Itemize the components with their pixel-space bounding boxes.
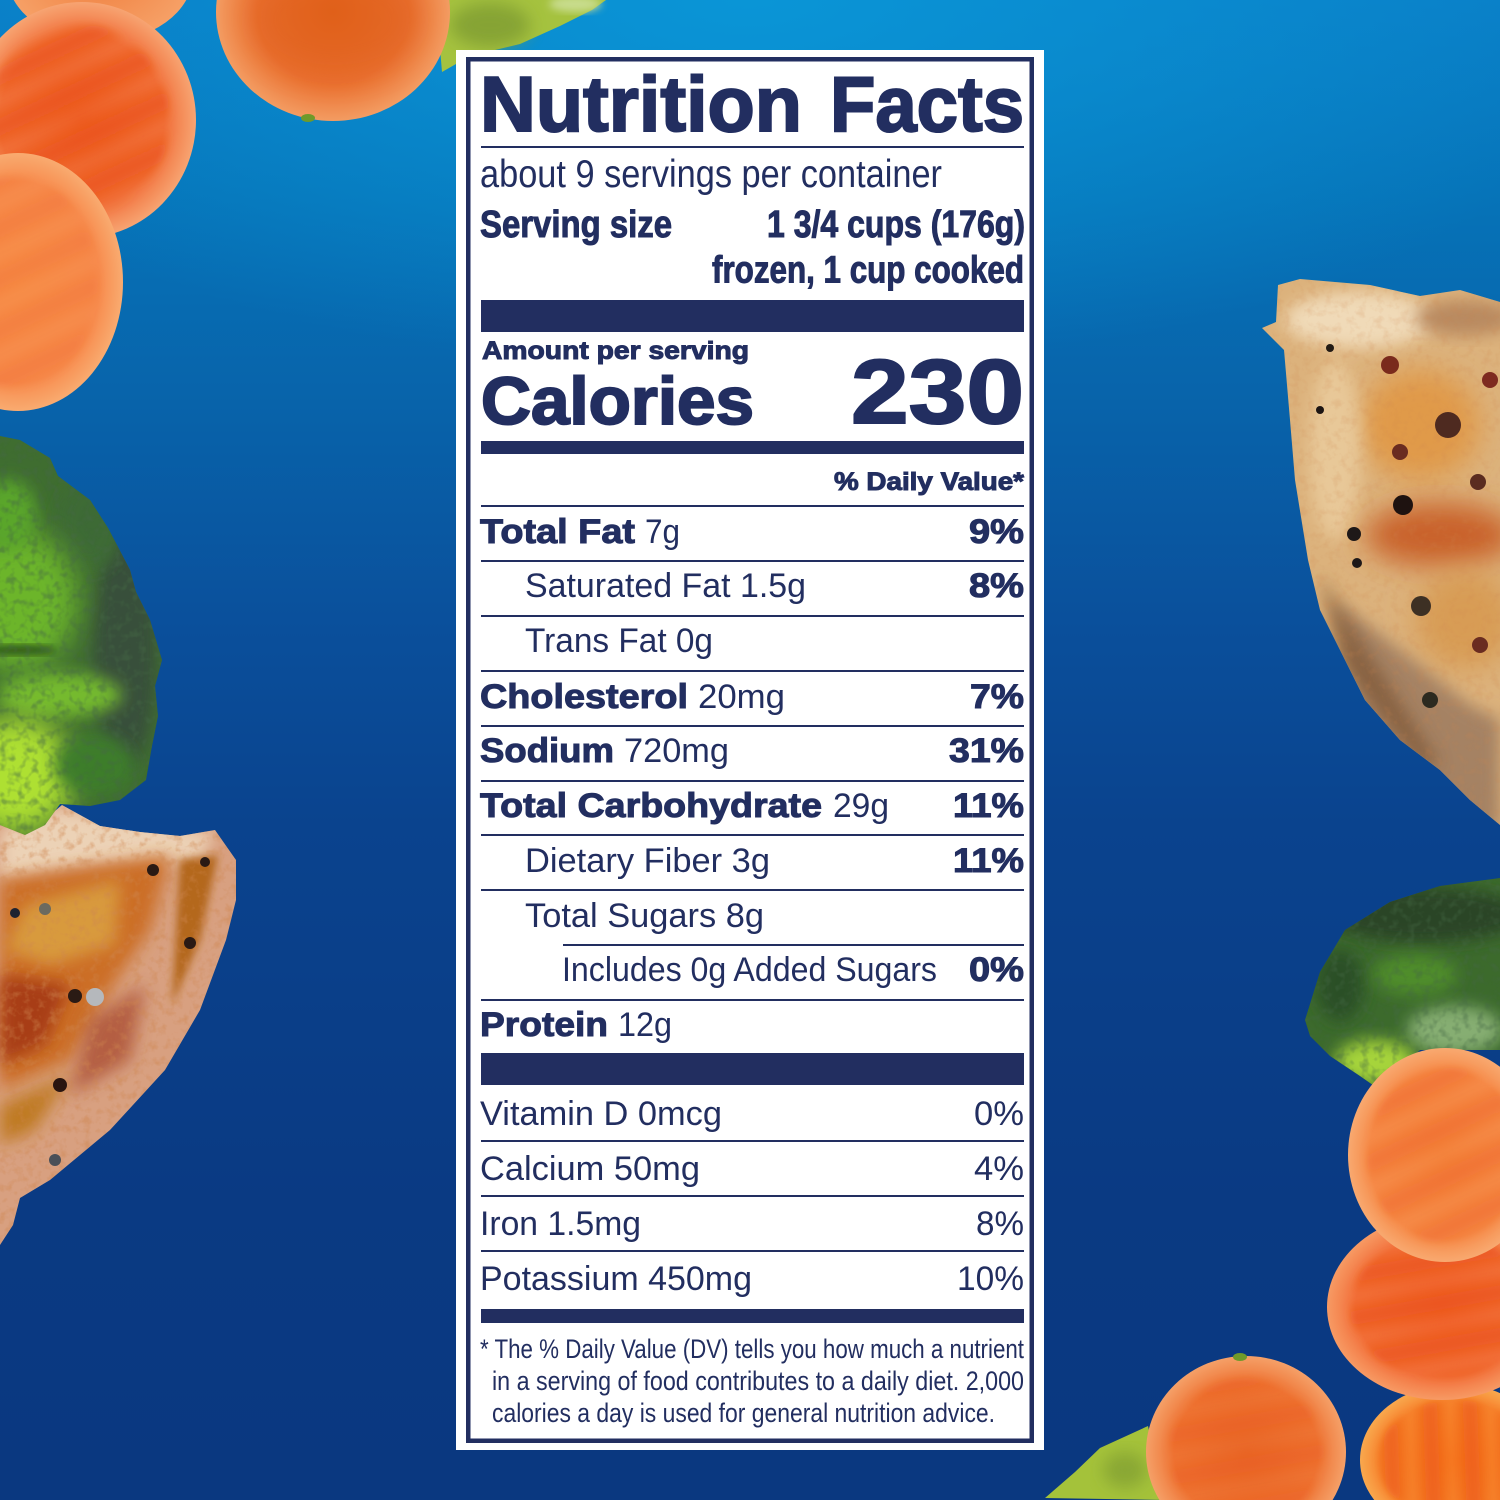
row: total carbohydrate: 11% [953, 787, 1024, 825]
image: carrots right [1327, 1048, 1500, 1500]
row: iron [480, 1205, 1024, 1243]
row: potassium: Potassium 450mg [480, 1260, 752, 1298]
calories block: Amount per serving [482, 337, 749, 365]
row: saturated fat: Saturated Fat 1.5g [525, 567, 806, 605]
nutrient rows [480, 505, 1024, 1044]
image: chicken right [1260, 275, 1500, 830]
title: Nutrition [480, 60, 802, 148]
row: total fat: Total Fat [480, 513, 635, 551]
row: total carbohydrate [480, 787, 1024, 825]
footnote [480, 1334, 1024, 1428]
row: sodium: Sodium [480, 732, 614, 770]
row: iron: 8% [976, 1205, 1024, 1243]
title: Facts [830, 60, 1024, 148]
row: iron: Iron 1.5mg [480, 1205, 641, 1243]
image: carrots top left [0, 0, 196, 411]
medium rule [481, 1309, 1024, 1323]
calories block: Calories [481, 364, 754, 439]
row: total fat: 7g [645, 513, 680, 551]
row: potassium: 10% [957, 1260, 1024, 1298]
medium rule [481, 441, 1024, 454]
row: calcium: 4% [974, 1150, 1024, 1188]
row: protein: 12g [618, 1006, 672, 1044]
row: added sugars: Includes 0g Added Sugars [562, 951, 937, 989]
row: cholesterol: 7% [970, 678, 1024, 716]
row: calcium [480, 1150, 1024, 1188]
image: carrot top [216, 0, 450, 122]
row: total carbohydrate: Total Carbohydrate [480, 787, 822, 825]
row: sodium [480, 732, 1024, 770]
title [480, 60, 1024, 148]
row: total sugars: Total Sugars 8g [525, 897, 764, 935]
servings block: Serving size [480, 204, 672, 246]
servings block [480, 146, 1025, 292]
image: broccoli right [1300, 875, 1500, 1095]
row: saturated fat: 8% [969, 567, 1024, 605]
thick rule [481, 300, 1024, 332]
calories block [481, 337, 1024, 443]
servings block: frozen, 1 cup cooked [712, 250, 1024, 292]
row: protein: Protein [480, 1006, 608, 1044]
image: carrot bottom [1146, 1353, 1346, 1500]
row: cholesterol: 20mg [698, 678, 785, 716]
row: vitamin d [480, 1095, 1024, 1133]
row: sodium: 720mg [624, 732, 729, 770]
row: potassium [480, 1260, 1024, 1298]
row: total fat [480, 513, 1024, 551]
row: vitamin d: Vitamin D 0mcg [480, 1095, 722, 1133]
row: dietary fiber: Dietary Fiber 3g [525, 842, 770, 880]
row: added sugars: 0% [969, 951, 1024, 989]
footnote: calories a day is used for general nutrition advice. [492, 1398, 995, 1428]
row: sodium: 31% [949, 732, 1024, 770]
row: cholesterol [480, 678, 1024, 716]
footnote: * The % Daily Value (DV) tells you how much a nutrient [480, 1334, 1024, 1364]
image: broccoli bottom [1045, 1426, 1165, 1500]
image: broccoli top [436, 0, 606, 72]
servings block: about 9 servings per container [480, 153, 942, 196]
row: saturated fat [525, 567, 1024, 605]
row: trans fat: Trans Fat 0g [525, 622, 713, 660]
row: cholesterol: Cholesterol [480, 678, 688, 716]
image: chicken left [0, 800, 240, 1250]
row: dietary fiber [525, 842, 1024, 880]
row: total carbohydrate: 29g [833, 787, 889, 825]
vitamin rows [480, 1095, 1024, 1298]
row: dietary fiber: 11% [953, 842, 1024, 880]
footnote: in a serving of food contributes to a daily diet. 2,000 [492, 1366, 1024, 1396]
image: broccoli left [0, 430, 170, 840]
row: vitamin d: 0% [974, 1095, 1024, 1133]
calories block: 230 [851, 342, 1024, 443]
row: protein [480, 1006, 672, 1044]
row: total fat: 9% [969, 513, 1024, 551]
thick rule [481, 1053, 1024, 1085]
servings block: 1 3/4 cups (176g) [767, 204, 1025, 246]
panel: nutrition facts label [456, 50, 1044, 1450]
daily value heading: % Daily Value* [834, 468, 1024, 496]
row: calcium: Calcium 50mg [480, 1150, 700, 1188]
